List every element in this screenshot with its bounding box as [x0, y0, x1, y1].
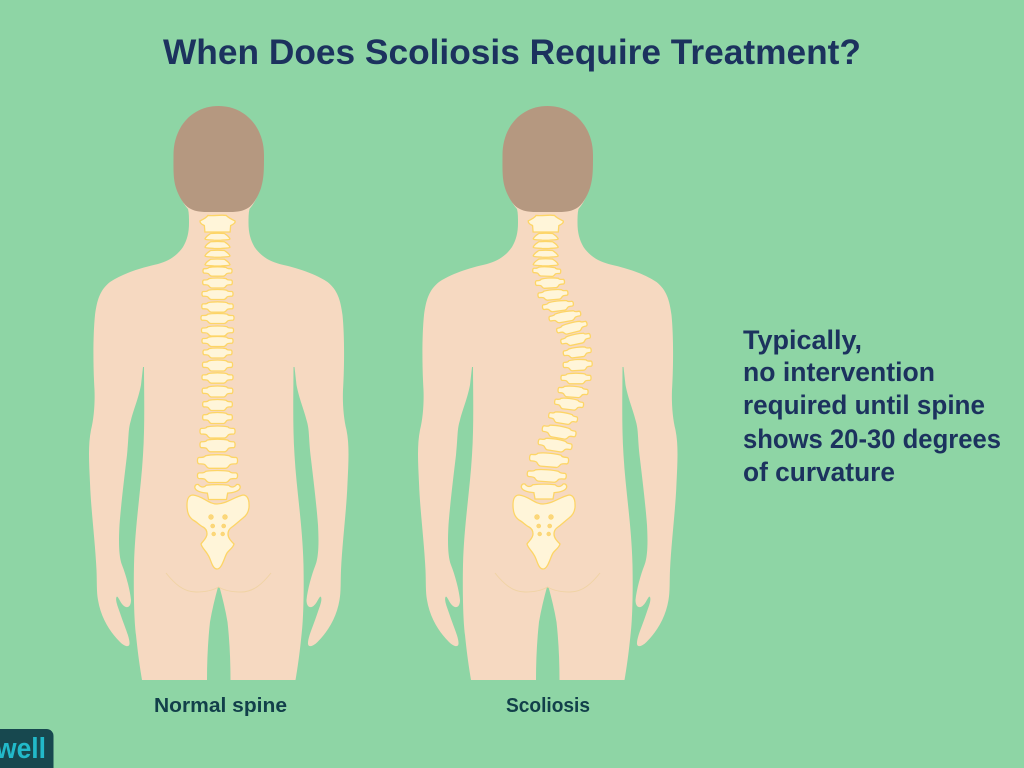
- label: scoliosis: Scoliosis: [506, 695, 590, 717]
- callout text: Typically,: [743, 325, 862, 355]
- sacrum: [513, 495, 575, 569]
- callout text: [743, 325, 1001, 487]
- callout text: required until spine: [743, 390, 985, 420]
- curved spine vertebrae: [521, 215, 593, 499]
- figure: scoliosis: [418, 106, 678, 680]
- figure: normal spine: [89, 106, 348, 680]
- straight spine vertebrae: [195, 215, 240, 500]
- back-view body and head: [89, 106, 348, 680]
- callout text: no intervention: [743, 357, 935, 387]
- title: When Does Scoliosis Require Treatment?: [163, 33, 861, 72]
- callout text: shows 20-30 degrees: [743, 424, 1001, 454]
- sacrum: [187, 495, 249, 569]
- label: normal spine: Normal spine: [154, 695, 287, 717]
- back-view body and head: [418, 106, 678, 680]
- callout text: of curvature: [743, 457, 895, 487]
